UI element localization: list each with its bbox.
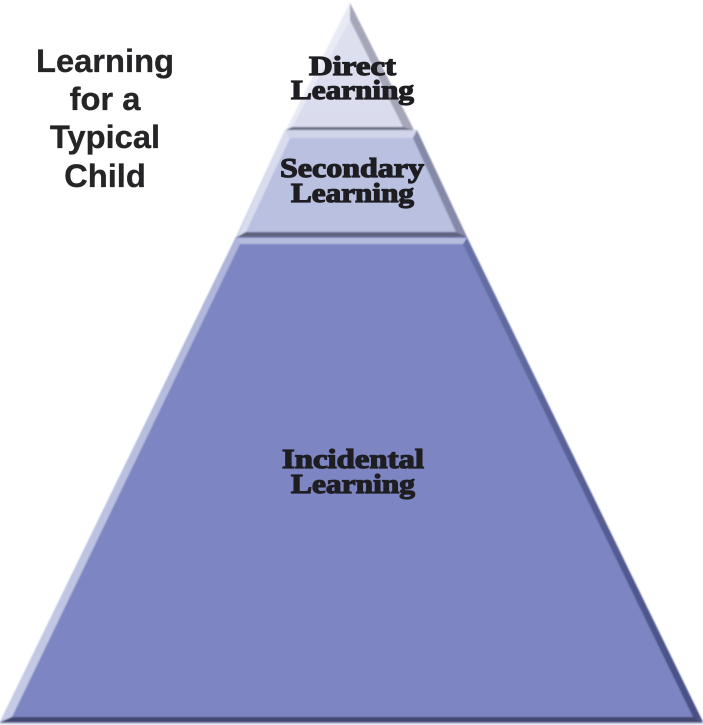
label: direct learning	[291, 51, 415, 105]
title	[36, 42, 174, 194]
label: direct learning: Learning	[291, 75, 415, 105]
label: incidental learning: Incidental	[282, 444, 425, 474]
title: Learning	[36, 42, 174, 79]
title: for a	[70, 80, 141, 117]
label: secondary learning: Learning	[291, 178, 415, 208]
label: incidental learning	[282, 444, 425, 499]
label: secondary learning	[280, 153, 425, 208]
title: Typical	[50, 118, 160, 155]
tier: direct learning	[286, 3, 414, 130]
tier: incidental learning	[0, 237, 703, 724]
label: incidental learning: Learning	[291, 469, 416, 499]
label: secondary learning: Secondary	[280, 153, 425, 183]
tier: secondary learning	[236, 130, 467, 237]
title: Child	[64, 157, 146, 194]
label: direct learning: Direct	[309, 51, 396, 81]
